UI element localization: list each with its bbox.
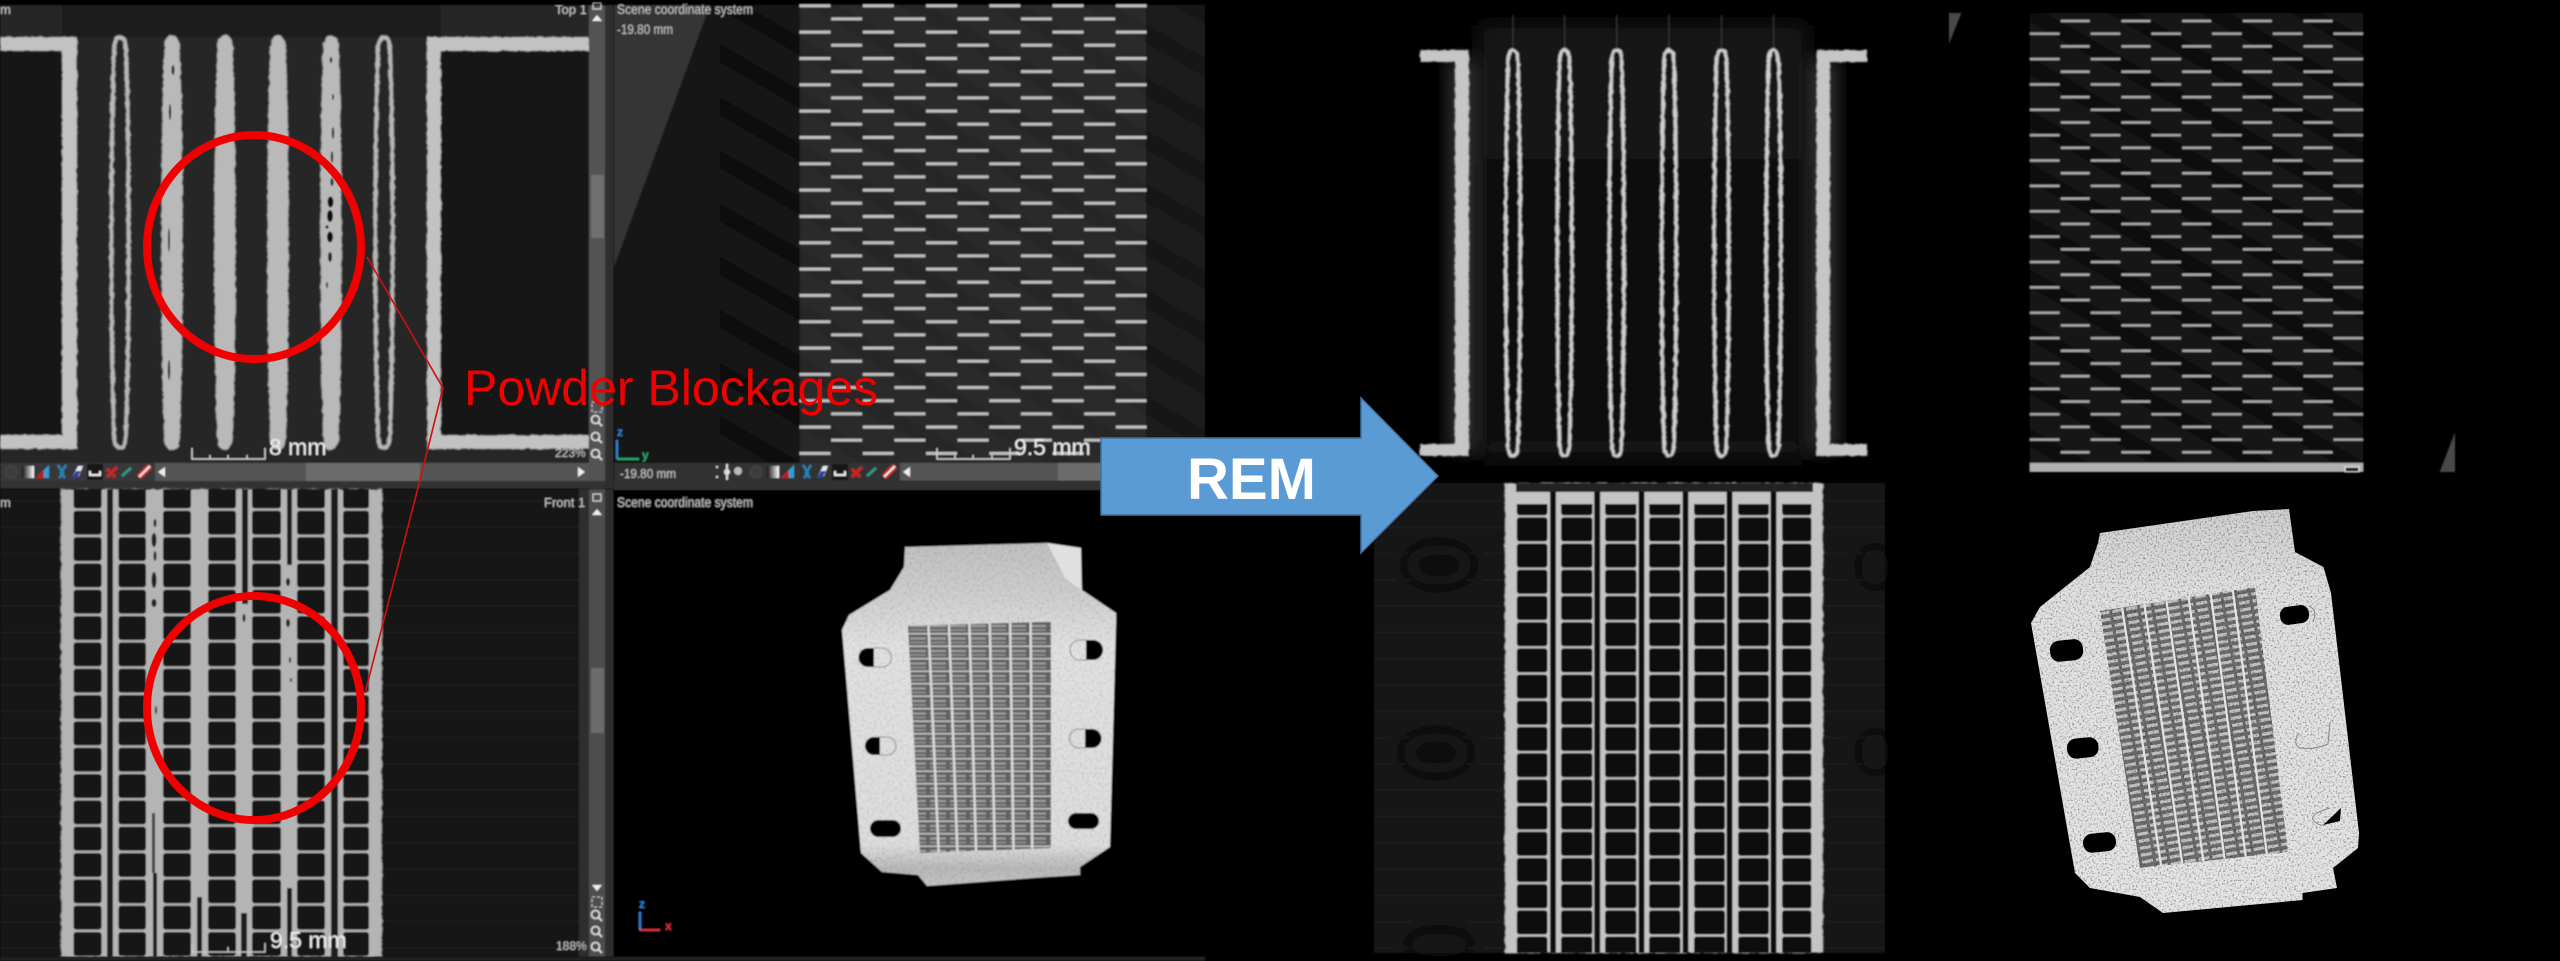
porosity specks in blocked channels (168, 57, 334, 380)
toolbar (614, 463, 1205, 489)
powder specks (152, 519, 292, 714)
scene label: Scene coordinate system (617, 495, 753, 510)
axis: z x: z (639, 897, 645, 911)
scale bar: 9.5 mm: 9.5 mm (1014, 434, 1091, 460)
scene labels: Scene coordinate system (617, 2, 753, 17)
3D part before REM (842, 543, 1116, 886)
cropped toolbar strip (2030, 463, 2363, 472)
viewport labels: 188% (556, 939, 587, 953)
panel: after REM side slice with dashes (1949, 13, 2455, 472)
mounting holes (2049, 604, 2341, 854)
part body (842, 543, 1116, 886)
part body (2031, 509, 2359, 913)
shadowed bolt holes (1402, 545, 1889, 957)
axis: z y: y (642, 448, 649, 462)
axis: z y (617, 425, 649, 462)
axis: z x: x (665, 919, 672, 933)
scale bar: 9.5 mm: 9.5 mm (270, 927, 347, 953)
walls: channel side brackets (0, 37, 589, 449)
panel: after REM top slice (1420, 15, 1867, 460)
callout line: powder blockages leader (365, 257, 443, 693)
channels: clear (1506, 50, 1781, 456)
red circle: blockages front view (147, 596, 361, 820)
scale bar: 8 mm (192, 434, 326, 460)
channels: partly blocked (111, 37, 393, 448)
toolbar: -19.80 mm (620, 466, 676, 481)
vertical scrollbar (589, 3, 614, 489)
callout: powder blockages: Powder Blockages (464, 360, 878, 416)
red circle: blockages top view (147, 135, 361, 359)
viewport labels: m (0, 495, 11, 510)
panel: before REM 3D rendering (0, 481, 1205, 961)
open channel gaps (1550, 492, 1776, 953)
panel: after REM front slice grid (1374, 483, 1889, 957)
walls: channel side brackets (1420, 50, 1867, 456)
toolbar (0, 463, 605, 489)
scale bar: 8 mm: 8 mm (269, 434, 326, 460)
grid cells (61, 489, 382, 957)
scene labels (617, 2, 753, 37)
scale bar: 9.5 mm (937, 434, 1091, 460)
slit dashes (2030, 19, 2363, 459)
panel: before REM front slice grid (0, 489, 614, 957)
panel: after REM 3D rendering (2031, 509, 2359, 913)
scene labels: -19.80 mm (617, 22, 673, 37)
arrow: REM process (1101, 398, 1438, 553)
cell grid (908, 622, 1051, 853)
slit dashes (799, 4, 1146, 456)
viewport labels: Front 1 (544, 495, 585, 510)
viewport labels (0, 495, 587, 953)
faint traces above channels (1513, 15, 1774, 50)
grid cells (1516, 504, 1812, 953)
arrow label: REM (1187, 447, 1316, 512)
viewport labels: Top 1 (555, 2, 587, 17)
panel: before REM top slice (0, 2, 614, 489)
grid structure (61, 489, 382, 957)
cell grid (2100, 587, 2288, 868)
viewport labels: 223% (555, 446, 586, 460)
grid ribs (2122, 590, 2267, 866)
viewport labels: m (0, 2, 11, 17)
axis: z x (639, 897, 672, 933)
vertical scrollbar (589, 489, 614, 957)
mounting holes (858, 640, 1103, 837)
grid structure (1505, 483, 1823, 953)
open and blocked channel slits (107, 489, 338, 957)
panel: before REM side slice with dashes (614, 0, 1205, 489)
axis: z y: z (617, 425, 623, 439)
viewport labels (0, 2, 587, 460)
scale bar: 9.5 mm (192, 927, 347, 953)
grid ribs (928, 622, 1032, 852)
